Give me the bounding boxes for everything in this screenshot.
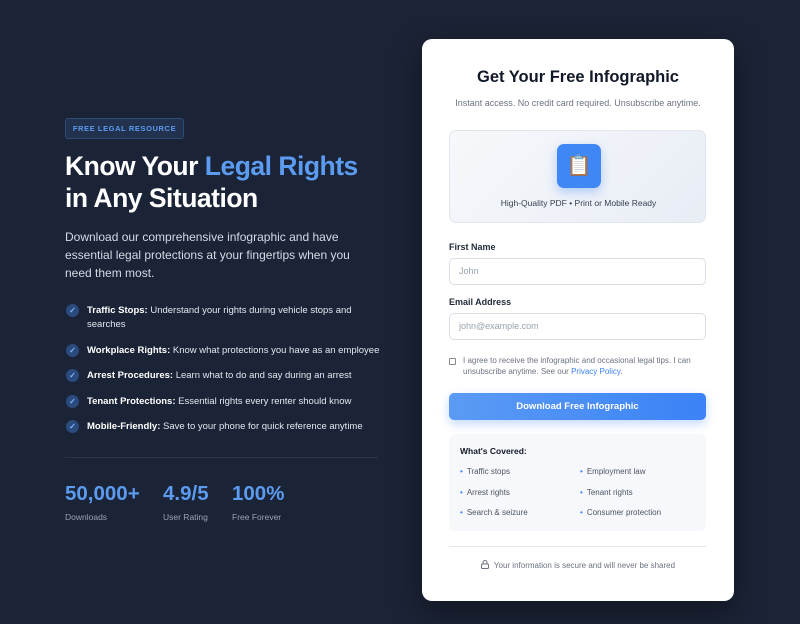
subtitle: Instant access. No credit card required. Unsubscribe anytime. bbox=[455, 98, 701, 108]
first name field: John bbox=[459, 266, 479, 276]
title: Know Your Legal Rights bbox=[65, 151, 358, 181]
item: mobile: ✓ bbox=[69, 422, 76, 431]
download button bbox=[449, 393, 706, 420]
covered box: • Tenant rights bbox=[580, 488, 633, 497]
intro paragraph: Download our comprehensive infographic and have essential legal protections at your fingertips when you need them most. bbox=[65, 230, 350, 280]
stat rating bbox=[163, 482, 209, 522]
item: tenant: Tenant Protections: Essential rights every renter should know bbox=[87, 396, 351, 407]
stat free: 100% bbox=[232, 482, 284, 505]
stat downloads: 50,000+ bbox=[65, 482, 140, 505]
title bbox=[65, 151, 358, 213]
item: arrest: Arrest Procedures: Learn what to do and say during an arrest bbox=[87, 370, 352, 381]
first name field: First Name bbox=[449, 242, 496, 252]
item: mobile: Mobile-Friendly: Save to your phone for quick reference anytime bbox=[87, 421, 363, 432]
stat downloads: Downloads bbox=[65, 512, 107, 522]
feature list bbox=[66, 304, 379, 433]
consent checkbox: I agree to receive the infographic and occasional legal tips. I can unsubscribe anytime. See our Privacy Policy. bbox=[463, 356, 691, 376]
badge: FREE LEGAL RESOURCE bbox=[73, 124, 176, 133]
title: in Any Situation bbox=[65, 183, 258, 213]
stats bbox=[65, 482, 284, 522]
covered box: What's Covered: bbox=[460, 446, 527, 456]
stat downloads bbox=[65, 482, 140, 522]
email field: john@example.com bbox=[459, 321, 539, 331]
email field bbox=[449, 297, 706, 340]
item: traffic: ✓ bbox=[69, 306, 76, 315]
covered box bbox=[449, 434, 706, 531]
preview caption: High-Quality PDF • Print or Mobile Ready bbox=[501, 198, 656, 208]
covered box: • Traffic stops bbox=[460, 467, 510, 476]
stat rating: 4.9/5 bbox=[163, 482, 209, 505]
covered box: • Employment law bbox=[580, 467, 646, 476]
security note: Your information is secure and will never be shared bbox=[494, 561, 675, 570]
badge bbox=[65, 118, 184, 139]
stat free bbox=[232, 482, 284, 522]
download button: Download Free Infographic bbox=[516, 401, 639, 412]
item: tenant: ✓ bbox=[69, 397, 76, 406]
icon: clipboard: 📋 bbox=[567, 155, 591, 177]
covered box: • Search & seizure bbox=[460, 508, 528, 517]
item: arrest: ✓ bbox=[69, 371, 76, 380]
covered box: • Consumer protection bbox=[580, 508, 661, 517]
email field: Email Address bbox=[449, 297, 511, 307]
item: workplace: Workplace Rights: Know what protections you have as an employee bbox=[87, 345, 379, 356]
form card bbox=[422, 39, 734, 601]
preview box bbox=[449, 130, 706, 223]
covered box: • Arrest rights bbox=[460, 488, 510, 497]
card title: Get Your Free Infographic bbox=[477, 68, 679, 86]
stat free: Free Forever bbox=[232, 512, 281, 522]
stat rating: User Rating bbox=[163, 512, 208, 522]
item: workplace: ✓ bbox=[69, 346, 76, 355]
item: traffic: Traffic Stops: Understand your rights during vehicle stops and searches bbox=[87, 305, 352, 330]
icon: clipboard bbox=[557, 144, 601, 188]
first name field bbox=[449, 242, 706, 285]
